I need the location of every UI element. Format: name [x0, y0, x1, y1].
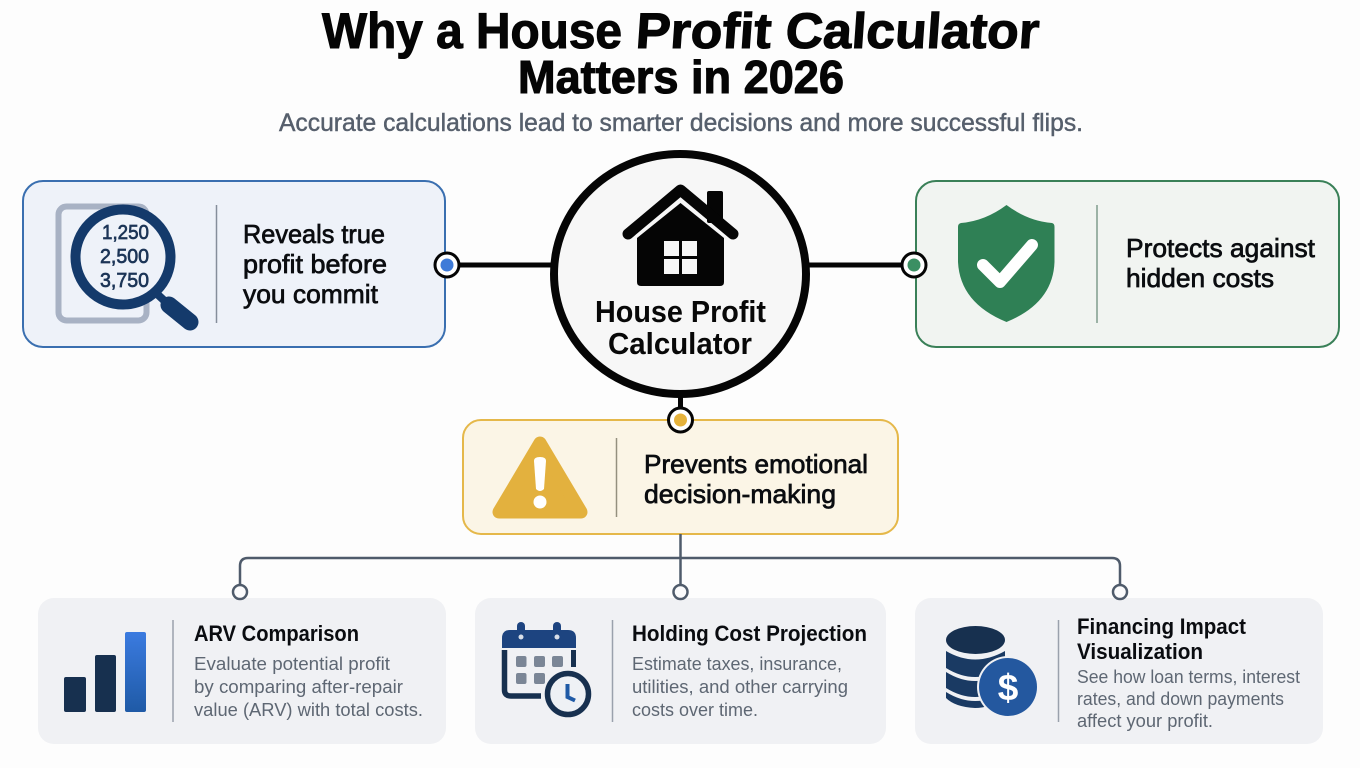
text: protects against hidden costs: hidden costs [1126, 263, 1274, 293]
text: house profit calculator [595, 294, 766, 361]
panel: reveals true profit [23, 181, 445, 347]
heading: holding cost projection: Holding Cost Projection [632, 621, 867, 646]
panel: prevents emotional decision-making [463, 420, 898, 534]
text: financing description [1077, 666, 1300, 731]
icon: bar chart [64, 632, 146, 712]
text: reveals true profit: Reveals true [243, 219, 385, 249]
node: bottom connector [668, 408, 692, 432]
connector: left and right arms [458, 265, 903, 410]
icon: coin stack with dollar badge: $ [998, 667, 1019, 708]
text: ARV description: Evaluate potential profit [194, 653, 390, 674]
text: protects against hidden costs [1126, 233, 1316, 293]
panel: financing impact visualization [915, 598, 1323, 744]
node: right connector [902, 253, 926, 277]
text: protects against hidden costs: Protects against [1126, 233, 1316, 263]
title: Matters in 2026 [518, 51, 844, 103]
text: financing description: affect your profit. [1077, 710, 1213, 731]
text: holding cost description: Estimate taxes, insurance, [632, 653, 842, 674]
panel: protects against hidden costs [916, 181, 1339, 347]
title: Why a House [322, 3, 622, 59]
node: left connector [435, 253, 459, 277]
icon: magnifier over numbers: 1,250 [102, 221, 149, 244]
tree connector to feature cards [233, 534, 1127, 599]
text: prevents emotional decision-making: decision-making [644, 479, 836, 509]
text: holding cost description [632, 653, 848, 720]
text: reveals true profit: you commit [243, 279, 379, 309]
heading: ARV comparison: ARV Comparison [194, 621, 359, 646]
panel: ARV comparison [38, 598, 446, 744]
icon: magnifier over numbers: 2,500 [100, 245, 149, 268]
icon: warning triangle [499, 443, 581, 512]
icon: house [628, 190, 733, 286]
panel: central house profit calculator [554, 154, 806, 394]
text: house profit calculator: House Profit [595, 294, 766, 329]
text: financing description: See how loan terms, interest [1077, 666, 1300, 687]
title: Profit Calculator [634, 3, 1041, 59]
icon: calendar with clock [502, 622, 588, 714]
icon: magnifier over numbers [58, 206, 190, 322]
icon: magnifier over numbers: 3,750 [100, 269, 149, 292]
title [322, 3, 1041, 103]
text: reveals true profit: profit before [243, 249, 387, 279]
icon: coin stack with dollar badge [946, 626, 1039, 718]
text: prevents emotional decision-making: Prevents emotional [644, 449, 868, 479]
text: ARV description: by comparing after-repair [194, 676, 403, 697]
icon: shield with check [958, 205, 1054, 322]
subtitle: Accurate calculations lead to smarter decisions and more successful flips. [279, 109, 1083, 137]
text: house profit calculator: Calculator [608, 326, 752, 361]
text: holding cost description: costs over time. [632, 699, 758, 720]
heading: financing impact visualization: Financing Impact [1077, 614, 1247, 639]
panel: holding cost projection [475, 598, 886, 744]
text: holding cost description: utilities, and other carrying [632, 676, 848, 697]
text: reveals true profit [243, 219, 387, 309]
text: ARV description: value (ARV) with total costs. [194, 699, 423, 720]
text: prevents emotional decision-making [644, 449, 868, 509]
text: financing description: rates, and down payments [1077, 688, 1284, 709]
heading: financing impact visualization [1077, 614, 1247, 664]
heading: financing impact visualization: Visualization [1077, 639, 1203, 664]
text: ARV description [194, 653, 423, 720]
